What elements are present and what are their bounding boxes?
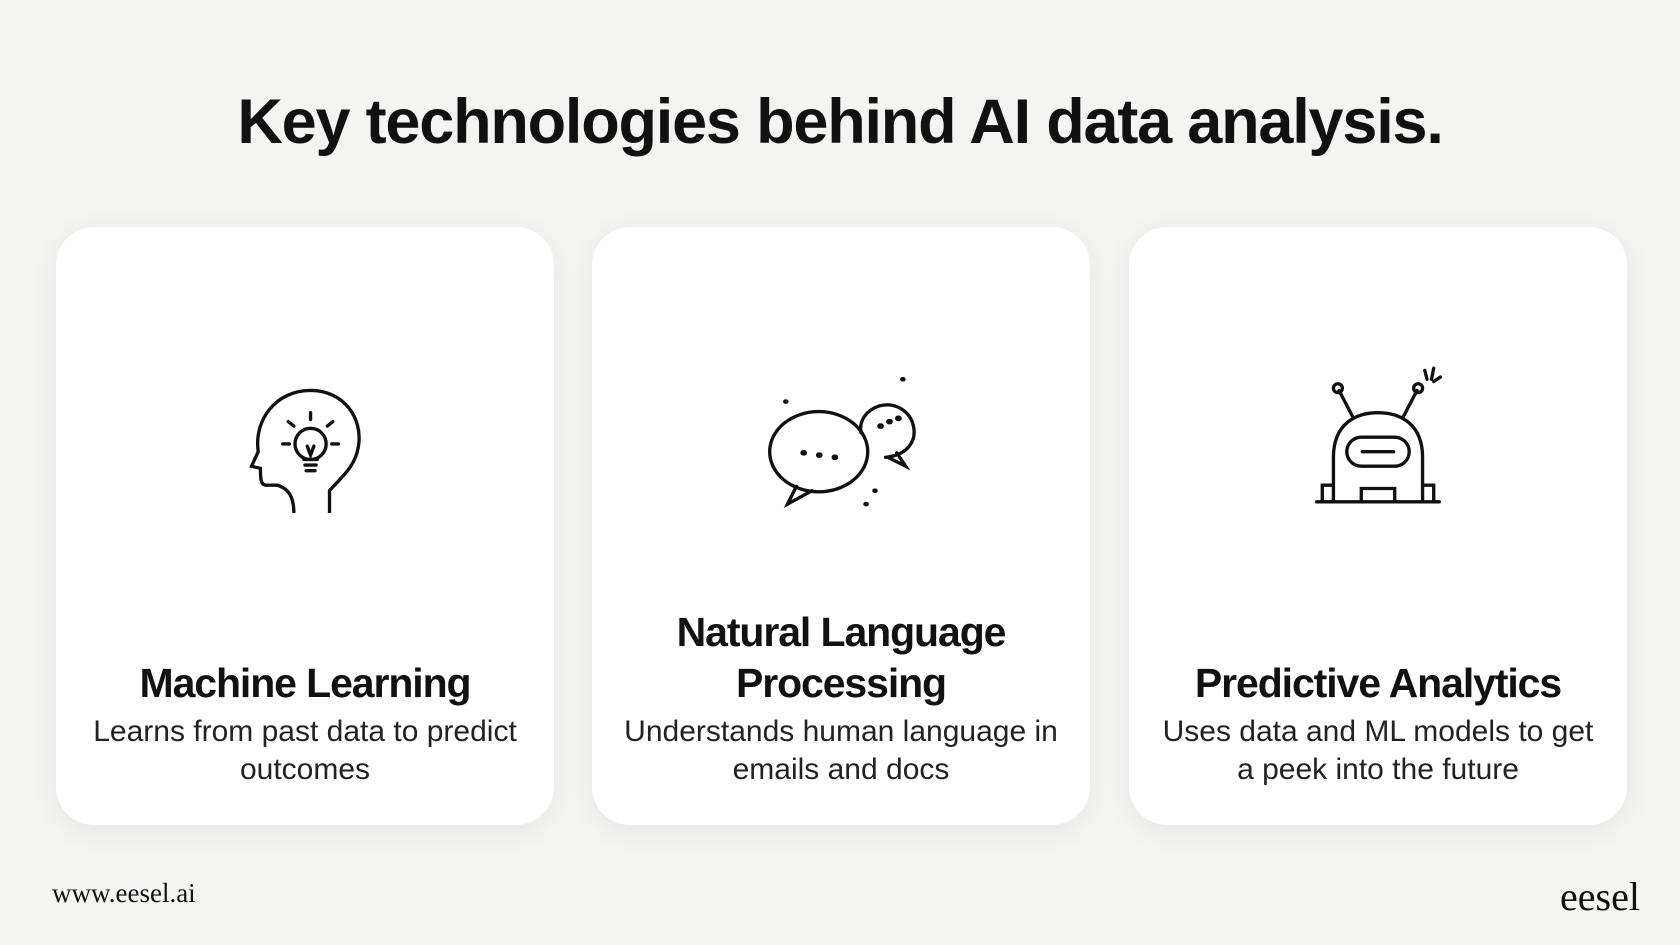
text: predictive analytics [1163, 660, 1594, 786]
text: machine learning: Learns from past data to predict [93, 715, 517, 748]
text: predictive analytics: Predictive Analytics [1195, 660, 1561, 706]
text: machine learning: Machine Learning [140, 660, 470, 706]
text: machine learning: outcomes [240, 753, 370, 786]
text: nlp: Natural Language [677, 609, 1005, 655]
text: predictive analytics: Uses data and ML models to get [1163, 715, 1593, 748]
text: nlp: Processing [736, 660, 946, 706]
panel: predictive analytics [1129, 227, 1627, 825]
text: nlp [624, 609, 1058, 786]
icon: head with lightbulb [249, 388, 361, 513]
text: predictive analytics: a peek into the future [1237, 753, 1519, 786]
icon: chat bubbles [768, 377, 916, 508]
footer logo: eesel [1560, 874, 1640, 919]
text: nlp: emails and docs [733, 753, 949, 786]
text: nlp: Understands human language in [624, 715, 1058, 748]
panel: natural language processing [592, 227, 1090, 825]
footer url: www.eesel.ai [52, 878, 196, 908]
title: Key technologies behind AI data analysis. [237, 87, 1443, 157]
panel: machine learning [56, 227, 554, 825]
text: machine learning [93, 660, 517, 786]
icon: robot [1315, 366, 1442, 504]
